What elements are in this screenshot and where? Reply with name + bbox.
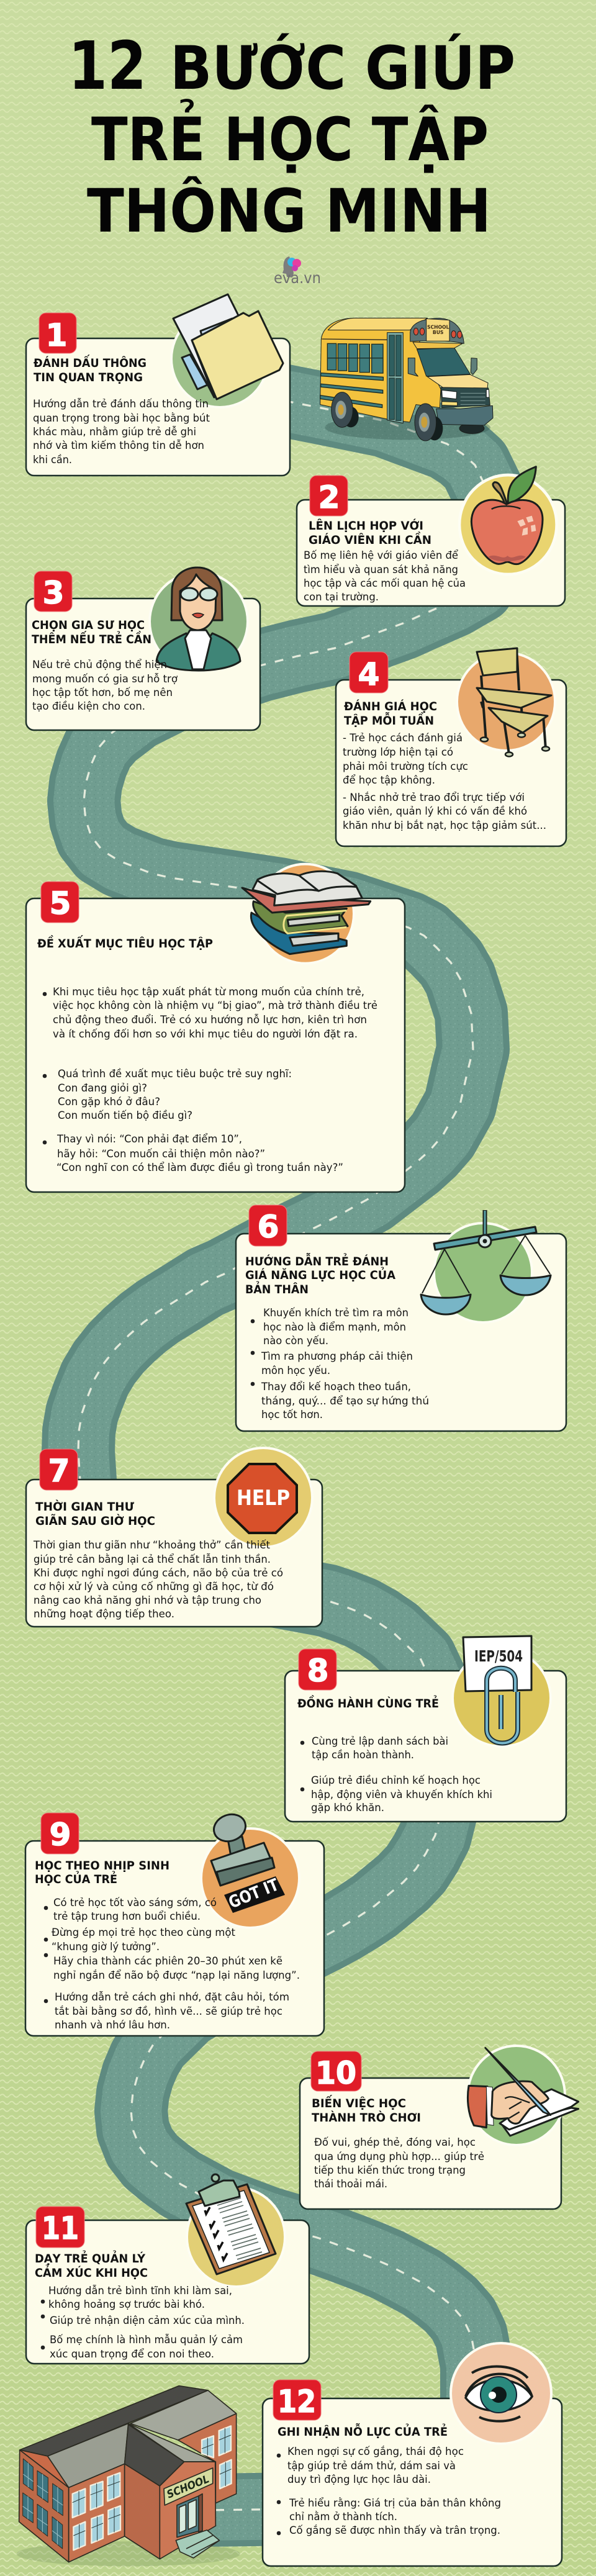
step badge 8: 8 [307,1653,328,1689]
body text and bullets: Đừng ép mọi trẻ học theo cùng một [52,1927,235,1939]
step badge 4 [350,652,388,693]
heading [312,2094,421,2125]
body text and bullets: Hãy chia thành các phiên 20–30 phút xen kẽ [53,1955,282,1968]
body text [33,1539,283,1620]
logo: eva.vn: eva.vn [274,269,321,287]
step badge 5 [41,882,79,923]
body text: thái thoải mái. [314,2178,387,2190]
step badge 10: 10 [315,2055,356,2091]
heading: ĐÁNH GIÁ HỌC [344,699,437,713]
body text and bullets: Khen ngợi sự cố gắng, thái độ học [287,2445,464,2458]
body text: giáo viên, quản lý khi có vấn đề khó [343,805,527,818]
heading: ĐỀ XUẤT MỤC TIÊU HỌC TẬP [37,934,213,951]
body text and bullets: duy trì động lực học lâu dài. [287,2474,431,2486]
illustration: school building [17,2386,240,2566]
panel 2: lịch họp giáo viên [297,467,565,606]
card background [26,898,405,1192]
step badge 3 [34,571,72,612]
body text and bullets: không hoảng sợ trước bài khó. [48,2298,205,2311]
title: 12 [68,28,147,105]
body text and bullets: Cố gắng sẽ được nhìn thấy và trân trọng. [289,2524,500,2537]
panel 9: học theo nhịp sinh học [25,1810,324,2036]
panel 8: đồng hành cùng trẻ [285,1636,566,1822]
body text and bullets: Có trẻ học tốt vào sáng sớm, có [53,1896,217,1909]
body text [304,549,466,603]
heading [32,618,151,646]
heading [309,518,431,547]
illustration: school bus: BUS [433,330,443,335]
body text and bullets: việc học không còn là nhiệm vụ “bị giao”, mà trở thành điều trẻ [53,999,377,1012]
body text and bullets: “Con nghĩ con có thể làm được điều gì trong tuần này?” [56,1161,343,1174]
body text and bullets [251,1306,429,1421]
heading [35,1499,155,1528]
heading: HỌC THEO NHỊP SINH [35,1859,169,1873]
step badge 6: 6 [258,1209,279,1245]
body text: Nếu trẻ chủ động thể hiện [32,658,167,671]
heading: GIÁO VIÊN KHI CẦN [309,531,431,547]
heading [344,699,437,728]
step badge 1: 1 [46,317,67,353]
body text: tiếp thu kiến thức trong trạng [314,2164,466,2177]
heading: TIN QUAN TRỌNG [34,371,143,384]
heading: THÀNH TRÒ CHƠI [312,2110,421,2125]
icon: hand writing [467,2046,579,2145]
body text and bullets: chỉ nằm ở thành tích. [289,2510,397,2523]
panel 6: đánh giá năng lực [236,1205,566,1431]
heading: CHỌN GIA SƯ HỌC [32,618,145,632]
body text [32,658,178,713]
body text: những hoạt động tiếp theo. [34,1607,174,1620]
logo: eva.vn [274,256,321,287]
heading [35,2250,148,2280]
heading: HƯỚNG DẪN TRẺ ĐÁNH [245,1252,389,1268]
panel 11: quản lý cảm xúc [26,2174,309,2364]
panel 10: biến việc học thành trò chơi [300,2046,579,2209]
icon: school chair [457,648,555,756]
card background [285,1671,566,1822]
body text and bullets: tập cần hoàn thành. [312,1748,414,1761]
body text and bullets [44,1896,300,2031]
body text: học tập và các mối quan hệ của [304,577,466,590]
step badge 12: 12 [278,2384,316,2420]
body text and bullets: học nào là điểm mạnh, môn [263,1321,406,1334]
card background [26,2220,309,2364]
illustration: school building: SCHOOL [165,2473,211,2501]
heading [34,354,147,384]
body text: - Trẻ học cách đánh giá [343,732,463,744]
heading: TẬP MỖI TUẦN [344,711,434,728]
body text: - Nhắc nhở trẻ trao đổi trực tiếp với [343,791,525,804]
winding road [78,397,492,2510]
heading: DẠY TRẺ QUẢN LÝ [35,2250,145,2266]
icon: eye [451,2343,551,2444]
body text and bullets: Quá trình đề xuất mục tiêu buộc trẻ suy nghĩ: [58,1067,292,1080]
step badge 9: 9 [50,1817,71,1853]
card background [297,500,565,606]
title: BƯỚC GIÚP [170,33,515,103]
body text: khăn như bị bắt nạt, học tập giảm sút... [343,819,546,832]
step badge 4: 4 [358,656,379,692]
body text and bullets: Tìm ra phương pháp cải thiện [261,1350,413,1363]
heading: CẢM XÚC KHI HỌC [35,2264,148,2280]
body text and bullets: hập, động viên và khuyến khích khi [311,1788,492,1801]
body text [33,397,210,466]
step badge 11: 11 [42,2210,79,2246]
body text: tạo điều kiện cho con. [32,700,145,713]
step badge 2 [310,476,348,516]
title: TRẺ HỌC TẬP [91,99,489,174]
body text: Hướng dẫn trẻ đánh dấu thông tin [33,397,209,410]
body text and bullets: hãy hỏi: “Con muốn cải thiện môn nào?” [57,1147,265,1160]
body text and bullets: Thay đổi kế hoạch theo tuần, [261,1380,411,1393]
body text and bullets: tắt bài bằng sơ đồ, hình vẽ... sẽ giúp trẻ học [55,2005,282,2018]
body text and bullets: tháng, quý... để tạo sự hứng thú [261,1394,429,1408]
heading: LÊN LỊCH HỌP VỚI [309,518,423,533]
icon: IEP/504 paper with paperclip: IEP/504 [474,1647,523,1665]
heading: THÊM NẾU TRẺ CẦN [32,630,151,646]
panel 5: đề xuất mục tiêu [26,864,405,1192]
body text and bullets [43,985,377,1174]
body text and bullets [277,2445,501,2537]
body text and bullets: Giúp trẻ nhận diện cảm xúc của mình. [50,2315,245,2327]
illustration: school bus [320,318,493,441]
panel 12: ghi nhận nỗ lực [263,2343,562,2566]
step badge 2: 2 [318,479,340,515]
title [68,28,515,246]
body text and bullets: Trẻ hiểu rằng: Giá trị của bản thân không [289,2497,501,2510]
step badge 9 [41,1813,79,1854]
body text and bullets: Hướng dẫn trẻ cách ghi nhớ, đặt câu hỏi, tóm [55,1991,289,2004]
body text and bullets: học tốt hơn. [261,1408,323,1421]
body text: tìm hiểu và quan sát khả năng [304,563,458,576]
panel 3: chọn gia sư [26,567,260,730]
step badge 6 [249,1205,287,1246]
body text and bullets: trẻ tập trung hơn buổi chiều. [53,1910,201,1923]
body text and bullets: Thay vì nói: “Con phải đạt điểm 10”, [56,1132,242,1146]
body text: Bố mẹ liên hệ với giáo viên để [304,549,459,562]
body text: qua ứng dụng phù hợp... giúp trẻ [314,2151,484,2163]
heading: GIÃN SAU GIỜ HỌC [35,1513,155,1528]
body text [314,2136,484,2190]
card background [26,1480,322,1627]
body text and bullets: Cùng trẻ lập danh sách bài [312,1735,448,1748]
step badge 3: 3 [43,575,64,611]
body text: quan trọng trong bài học bằng bút [33,412,210,425]
body text and bullets [300,1735,492,1814]
icon: help stop sign [214,1448,312,1547]
icon: IEP/504 paper with paperclip [453,1636,551,1747]
body text: phải môi trường tích cực [343,761,468,773]
body text and bullets: nào còn yếu. [263,1334,328,1347]
body text: khi cần. [33,453,72,466]
illustration: school bus: SCHOOL [427,324,449,330]
body text: học tập tốt hơn, bố mẹ nên [32,686,173,699]
icon: GOT IT stamp: GOT IT [226,1875,282,1912]
card background [25,1841,324,2036]
heading: BIẾN VIỆC HỌC [312,2094,406,2110]
body text and bullets: tập giúp trẻ dám thử, dám sai và [287,2460,456,2472]
icon: stack of books [242,864,371,964]
step badge 7 [40,1449,78,1490]
body text and bullets: nghỉ ngắn để não bộ được “nạp lại năng lượng”. [53,1969,300,1982]
icon: teacher [150,567,248,671]
body text and bullets: Khuyến khích trẻ tìm ra môn [263,1306,409,1319]
heading: HỌC CỦA TRẺ [35,1871,117,1886]
body text and bullets: Con gặp khó ở đâu? [58,1096,160,1108]
heading: ĐÁNH DẤU THÔNG [34,354,147,370]
body text and bullets: và ít chống đối hơn so với khi mục tiêu do người lớn đặt ra. [53,1028,358,1041]
heading [35,1859,169,1886]
step badge 5: 5 [50,885,71,921]
icon: folder [171,294,283,407]
card background [26,338,290,476]
body text: để học tập không. [343,774,435,787]
panel 4: đánh giá học tập [336,648,566,846]
body text and bullets: Giúp trẻ điều chỉnh kế hoạch học [311,1774,481,1787]
card background [336,680,566,846]
body text: giúp trẻ cân bằng lại cả thể chất lẫn tinh thần. [34,1553,271,1566]
card background [26,599,260,730]
body text: khác màu, nhằm giúp trẻ dễ ghi [33,425,196,438]
body text and bullets: chủ động theo đuổi. Trẻ có xu hướng nỗ lực hơn, kiên trì hơn [53,1013,367,1026]
card background [300,2078,561,2209]
body text and bullets: Hướng dẫn trẻ bình tĩnh khi làm sai, [48,2284,232,2297]
step badge 7: 7 [48,1453,70,1489]
body text and bullets: Bố mẹ chính là hình mẫu quản lý cảm [50,2333,243,2346]
heading: BẢN THÂN [245,1281,309,1296]
icon: apple [459,467,557,574]
heading [245,1252,395,1296]
icon: balance scale [421,1210,551,1322]
heading: GIÁ NĂNG LỰC HỌC CỦA [245,1267,395,1282]
heading: THỜI GIAN THƯ [35,1499,134,1514]
panel 7: thời gian thư giãn [26,1448,322,1627]
step badge 1 [39,313,76,353]
body text and bullets: nhanh và nhớ lâu hơn. [55,2019,170,2031]
title: THÔNG MINH [87,176,491,246]
body text and bullets: gặp khó khăn. [311,1802,384,1814]
card background [236,1234,566,1431]
icon: GOT IT stamp [201,1810,299,1928]
body text and bullets: môn học yếu. [261,1364,330,1377]
body text: Khi được nghỉ ngơi đúng cách, não bộ của trẻ có [34,1567,283,1579]
step badge 8 [299,1649,336,1690]
body text: mong muốn có gia sư hỗ trợ [32,672,178,685]
heading: GHI NHẬN NỖ LỰC CỦA TRẺ [278,2422,448,2439]
body text and bullets: xúc quan trọng để con noi theo. [50,2348,214,2361]
body text: Đố vui, ghép thẻ, đóng vai, học [314,2136,476,2149]
panel 1: đánh dấu thông tin [26,294,290,476]
icon: clipboard [186,2174,285,2287]
card background [263,2398,562,2566]
body text [343,732,546,832]
body text and bullets [41,2284,245,2361]
heading: ĐỒNG HÀNH CÙNG TRẺ [297,1694,439,1711]
body text: nâng cao khả năng ghi nhớ và tập trung cho [34,1594,261,1607]
body text: Thời gian thư giãn như “khoảng thở” cần thiết [33,1539,270,1552]
body text: cơ hội xử lý và củng cố những gì đã học, từ đó [34,1580,274,1593]
body text and bullets: “khung giờ lý tưởng”. [52,1941,160,1953]
body text: con tại trường. [304,591,379,603]
body text: nhớ và tìm kiếm thông tin dễ hơn [33,439,204,452]
body text and bullets: Con muốn tiến bộ điều gì? [58,1109,192,1122]
icon: help stop sign: HELP [237,1486,290,1511]
body text and bullets: Con đang giỏi gì? [58,1082,147,1095]
body text: trường lớp hiện tại có [343,746,453,759]
body text and bullets: Khi mục tiêu học tập xuất phát từ mong muốn của chính trẻ, [53,985,364,998]
